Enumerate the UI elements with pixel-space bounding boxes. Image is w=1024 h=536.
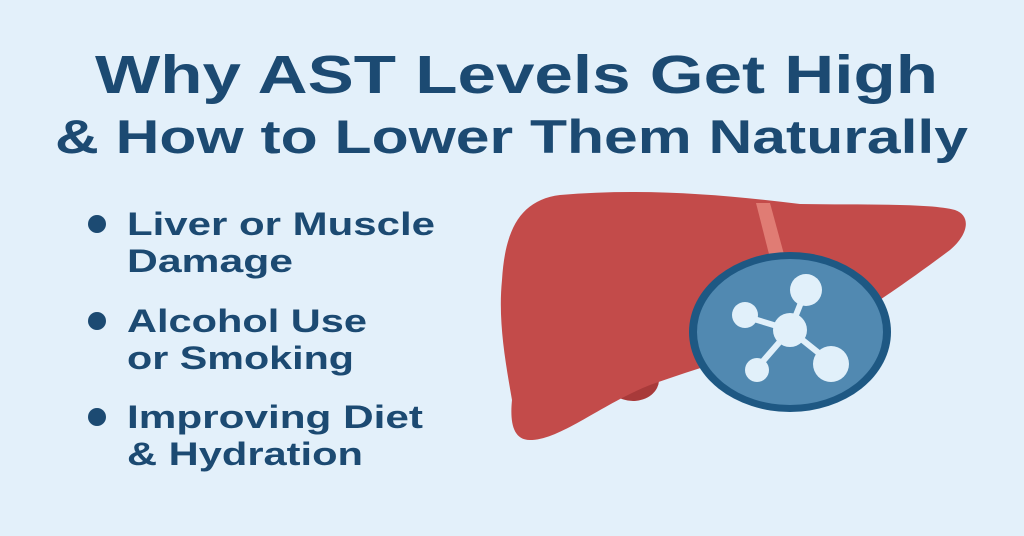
gallbladder (607, 359, 659, 401)
bullet: alcohol use or smoking (88, 303, 367, 376)
bullet: alcohol use or smoking: or Smoking (127, 340, 354, 376)
ligament (756, 203, 785, 262)
title (55, 45, 968, 163)
bullet: improving diet & hydration: Improving Diet (127, 399, 423, 435)
illustration: liver (501, 192, 966, 440)
bullet: liver or muscle damage: Liver or Muscle (127, 206, 435, 242)
title: & How to Lower Them Naturally (55, 110, 968, 163)
icon: enzyme molecule badge (689, 252, 891, 412)
bullet: improving diet & hydration (88, 399, 423, 472)
bullet list (88, 206, 435, 472)
bullet: alcohol use or smoking: Alcohol Use (127, 303, 367, 339)
title: Why AST Levels Get High (95, 45, 938, 105)
bullet: liver or muscle damage: Damage (127, 243, 293, 279)
bullet: improving diet & hydration: & Hydration (127, 436, 363, 472)
bullet: liver or muscle damage (88, 206, 435, 279)
